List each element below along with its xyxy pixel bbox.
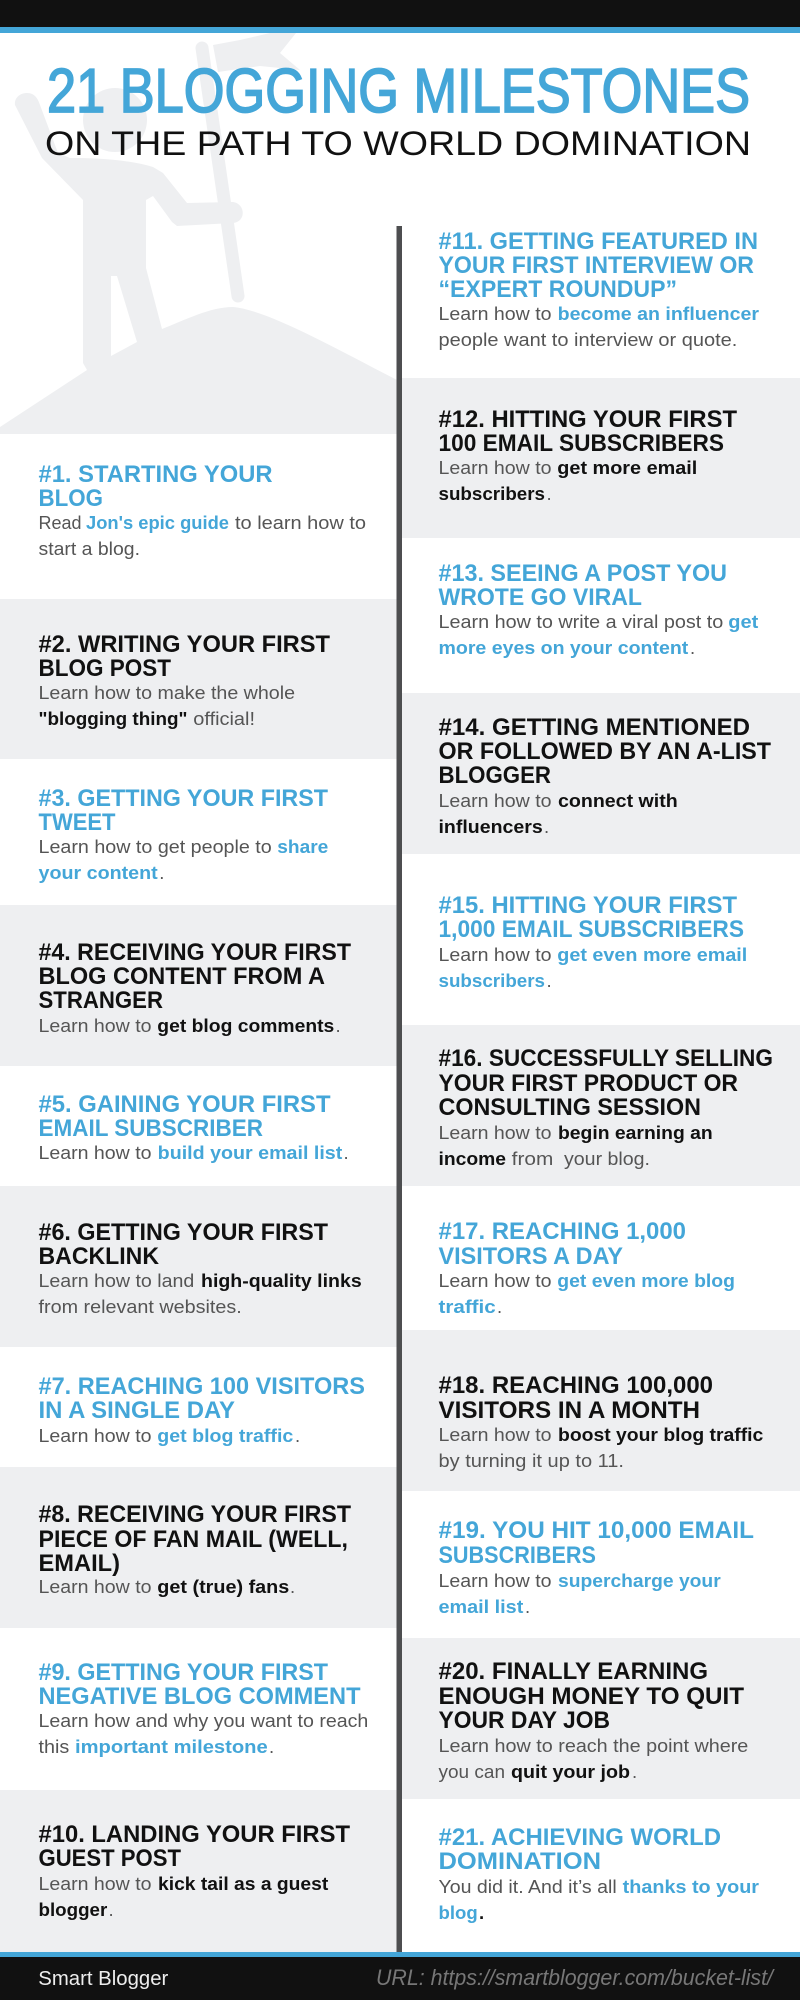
description 13: Learn how to write a viral post to — [438, 611, 723, 632]
panel: milestone 1 — [0, 434, 397, 599]
description 6 — [38, 1270, 362, 1317]
description 2: "blogging thing" — [38, 708, 187, 729]
description 7: . — [295, 1425, 300, 1446]
heading 2: #2. WRITING YOUR FIRST — [38, 631, 330, 658]
heading 19: #19. YOU HIT 10,000 EMAIL — [438, 1517, 754, 1544]
panel: milestone 16 — [402, 1025, 800, 1186]
heading 5: #5. GAINING YOUR FIRST — [38, 1091, 331, 1118]
heading 18 — [438, 1372, 713, 1424]
panel: milestone 7 — [0, 1347, 397, 1467]
panel: milestone 12 — [402, 378, 800, 538]
description 21 — [438, 1876, 759, 1923]
description 8: get (true) fans — [157, 1576, 289, 1597]
heading 21 — [438, 1824, 721, 1875]
description 16: your blog. — [564, 1148, 650, 1169]
description 1: start a blog. — [38, 538, 140, 559]
description 5: . — [344, 1142, 349, 1163]
heading 16 — [438, 1045, 773, 1121]
description 11: people want to interview or quote. — [438, 329, 737, 350]
heading 21: #21. ACHIEVING WORLD — [438, 1824, 721, 1851]
description 19 — [438, 1570, 721, 1617]
heading 11: YOUR FIRST INTERVIEW OR — [438, 252, 754, 279]
heading 13 — [438, 560, 727, 611]
description 15: get even more email — [557, 944, 747, 965]
description 9 — [38, 1710, 368, 1757]
description 10: . — [108, 1899, 114, 1920]
heading 12 — [438, 406, 737, 457]
heading 15 — [438, 892, 744, 943]
heading 20: YOUR DAY JOB — [438, 1707, 610, 1734]
panel: milestone 17 — [402, 1186, 800, 1330]
description 10: kick tail as a guest — [158, 1873, 328, 1894]
description 21: thanks to your — [623, 1876, 759, 1897]
description 8 — [38, 1576, 295, 1597]
heading 16: CONSULTING SESSION — [438, 1094, 701, 1121]
description 20: you can — [438, 1761, 505, 1782]
description 14: . — [544, 816, 549, 837]
description 2 — [38, 682, 295, 729]
heading 9: NEGATIVE BLOG COMMENT — [38, 1683, 361, 1710]
description 21: You did it. And it’s all — [438, 1876, 617, 1897]
description 17: . — [497, 1296, 502, 1317]
heading 1: BLOG — [38, 485, 103, 512]
heading 15: 1,000 EMAIL SUBSCRIBERS — [438, 916, 744, 943]
heading 14 — [438, 714, 771, 789]
heading 19 — [438, 1517, 754, 1569]
description 15: . — [546, 970, 552, 991]
panel: milestone 11 — [402, 226, 800, 378]
heading 3 — [38, 785, 328, 836]
description 3: Learn how to get people to — [38, 836, 272, 857]
description 7: get blog traffic — [157, 1425, 293, 1446]
top bar — [0, 0, 800, 33]
description 11: become an influencer — [558, 303, 759, 324]
heading 12: #12. HITTING YOUR FIRST — [438, 406, 737, 433]
description 12: Learn how to — [438, 457, 552, 478]
description 14: Learn how to — [438, 790, 552, 811]
background silhouette: climber with flag on hill — [0, 33, 397, 434]
heading 16: #16. SUCCESSFULLY SELLING — [438, 1045, 773, 1072]
heading 8: PIECE OF FAN MAIL (WELL, — [38, 1526, 348, 1553]
description 16: from — [512, 1148, 553, 1169]
heading 4: STRANGER — [38, 987, 163, 1014]
description 2: Learn how to make the whole — [38, 682, 295, 703]
heading 14: #14. GETTING MENTIONED — [438, 714, 750, 741]
description 11: Learn how to — [438, 303, 552, 324]
subtitle: ON THE PATH TO WORLD DOMINATION — [45, 125, 751, 163]
description 9: Learn how and why you want to reach — [38, 1710, 368, 1731]
description 14: connect with — [558, 790, 678, 811]
panel: milestone 21 — [402, 1799, 800, 1952]
description 20: . — [632, 1761, 637, 1782]
heading 7: #7. REACHING 100 VISITORS — [38, 1373, 365, 1400]
description 3: share — [277, 836, 328, 857]
description 9: important milestone — [75, 1736, 268, 1757]
description 5: Learn how to — [38, 1142, 152, 1163]
description 14 — [438, 790, 678, 837]
heading 9 — [38, 1659, 361, 1710]
heading 11: #11. GETTING FEATURED IN — [438, 228, 758, 255]
heading 10: GUEST POST — [38, 1845, 181, 1872]
heading 3: #3. GETTING YOUR FIRST — [38, 785, 328, 812]
heading 15: #15. HITTING YOUR FIRST — [438, 892, 737, 919]
heading 17 — [438, 1218, 686, 1270]
heading 10: #10. LANDING YOUR FIRST — [38, 1821, 350, 1848]
heading 1: #1. STARTING YOUR — [38, 461, 272, 488]
description 17: get even more blog — [557, 1270, 735, 1291]
panel: milestone 10 — [0, 1790, 397, 1952]
description 17: traffic — [438, 1296, 496, 1317]
description 3: . — [159, 862, 164, 883]
heading 17: VISITORS A DAY — [438, 1243, 623, 1270]
heading 13: WROTE GO VIRAL — [438, 584, 642, 611]
heading 21: DOMINATION — [438, 1848, 601, 1875]
description 10: Learn how to — [38, 1873, 152, 1894]
description 15: Learn how to — [438, 944, 552, 965]
description 4: get blog comments — [157, 1015, 334, 1036]
heading 2 — [38, 631, 330, 682]
heading 4 — [38, 939, 351, 1014]
description 1: Read — [38, 512, 82, 533]
heading 18: VISITORS IN A MONTH — [438, 1397, 700, 1424]
description 21: blog — [438, 1902, 478, 1923]
heading 20 — [438, 1658, 744, 1734]
heading 8: #8. RECEIVING YOUR FIRST — [38, 1501, 351, 1528]
heading 7: IN A SINGLE DAY — [38, 1397, 235, 1424]
description 19: supercharge your — [558, 1570, 721, 1591]
panel: milestone 5 — [0, 1066, 397, 1186]
description 12: subscribers — [438, 483, 545, 504]
heading 7 — [38, 1373, 365, 1424]
description 20: quit your job — [511, 1761, 630, 1782]
heading 10 — [38, 1821, 350, 1872]
description 14: influencers — [438, 816, 543, 837]
panel: milestone 20 — [402, 1638, 800, 1799]
heading 8 — [38, 1501, 351, 1577]
description 16: begin earning an — [558, 1122, 713, 1143]
description 11 — [438, 303, 759, 350]
description 18: by turning it up to 11. — [438, 1450, 624, 1471]
description 15 — [438, 944, 747, 991]
description 5: build your email list — [158, 1142, 342, 1163]
description 19: email list — [438, 1596, 523, 1617]
description 8: . — [290, 1576, 295, 1597]
heading 16: YOUR FIRST PRODUCT OR — [438, 1070, 738, 1097]
footer URL: URL: https://smartblogger.com/bucket-list/ — [376, 1965, 775, 1990]
description 13: more eyes on your content — [438, 637, 688, 658]
heading 20: ENOUGH MONEY TO QUIT — [438, 1683, 744, 1710]
description 6: high-quality links — [201, 1270, 362, 1291]
description 4 — [38, 1015, 341, 1036]
description 10 — [38, 1873, 328, 1920]
heading 2: BLOG POST — [38, 655, 171, 682]
description 1 — [38, 512, 366, 559]
description 5 — [38, 1142, 349, 1163]
description 13: get — [728, 611, 758, 632]
description 10: blogger — [38, 1899, 107, 1920]
panel: milestone 9 — [0, 1628, 397, 1790]
description 13 — [438, 611, 758, 658]
heading 20: #20. FINALLY EARNING — [438, 1658, 708, 1685]
description 18: Learn how to — [438, 1424, 552, 1445]
description 17: Learn how to — [438, 1270, 552, 1291]
heading 17: #17. REACHING 1,000 — [438, 1218, 686, 1245]
heading 18: #18. REACHING 100,000 — [438, 1372, 713, 1399]
description 1: to learn how to — [235, 512, 366, 533]
center divider — [396, 226, 402, 1952]
heading 13: #13. SEEING A POST YOU — [438, 560, 727, 587]
heading 14: OR FOLLOWED BY AN A-LIST — [438, 738, 771, 765]
description 7 — [38, 1425, 300, 1446]
heading 5: EMAIL SUBSCRIBER — [38, 1115, 263, 1142]
heading 19: SUBSCRIBERS — [438, 1542, 596, 1569]
panel: milestone 18 — [402, 1330, 800, 1491]
description 12: get more email — [557, 457, 697, 478]
description 20 — [438, 1735, 748, 1782]
description 9: this — [38, 1736, 69, 1757]
panel: milestone 15 — [402, 854, 800, 1025]
panel: milestone 13 — [402, 538, 800, 693]
description 12 — [438, 457, 697, 504]
description 16: income — [438, 1148, 506, 1169]
panel: milestone 3 — [0, 759, 397, 905]
panel: milestone 2 — [0, 599, 397, 759]
description 20: Learn how to reach the point where — [438, 1735, 748, 1756]
panel: milestone 19 — [402, 1491, 800, 1638]
description 19: Learn how to — [438, 1570, 552, 1591]
heading 11 — [438, 228, 758, 303]
panel: milestone 14 — [402, 693, 800, 854]
description 4: Learn how to — [38, 1015, 152, 1036]
description 12: . — [546, 483, 552, 504]
description 17 — [438, 1270, 735, 1317]
description 6: from relevant websites. — [38, 1296, 242, 1317]
heading 8: EMAIL) — [38, 1550, 120, 1577]
description 16: Learn how to — [438, 1122, 552, 1143]
footer brand: Smart Blogger — [38, 1968, 169, 1990]
heading 11: “EXPERT ROUNDUP” — [438, 276, 677, 303]
panel: milestone 4 — [0, 905, 397, 1066]
heading 3: TWEET — [38, 809, 116, 836]
description 16 — [438, 1122, 713, 1169]
heading 4: #4. RECEIVING YOUR FIRST — [38, 939, 351, 966]
heading 9: #9. GETTING YOUR FIRST — [38, 1659, 328, 1686]
heading 5 — [38, 1091, 331, 1142]
description 9: . — [269, 1736, 274, 1757]
description 6: Learn how to land — [38, 1270, 194, 1291]
heading 12: 100 EMAIL SUBSCRIBERS — [438, 430, 724, 457]
description 21: . — [479, 1902, 484, 1923]
description 18 — [438, 1424, 763, 1471]
description 15: subscribers — [438, 970, 545, 991]
heading 6: BACKLINK — [38, 1243, 160, 1270]
description 3: your content — [38, 862, 158, 883]
description 8: Learn how to — [38, 1576, 152, 1597]
description 19: . — [525, 1596, 530, 1617]
heading 6: #6. GETTING YOUR FIRST — [38, 1219, 328, 1246]
description 18: boost your blog traffic — [558, 1424, 763, 1445]
description 1: Jon's epic guide — [86, 512, 229, 533]
description 13: . — [690, 637, 695, 658]
panel: milestone 6 — [0, 1186, 397, 1347]
description 4: . — [336, 1015, 341, 1036]
description 3 — [38, 836, 328, 883]
heading 14: BLOGGER — [438, 762, 551, 789]
heading 1 — [38, 461, 272, 512]
panel: milestone 8 — [0, 1467, 397, 1628]
heading 6 — [38, 1219, 328, 1270]
heading 4: BLOG CONTENT FROM A — [38, 963, 325, 990]
description 7: Learn how to — [38, 1425, 152, 1446]
footer — [0, 1952, 800, 2000]
description 2: official! — [193, 708, 255, 729]
